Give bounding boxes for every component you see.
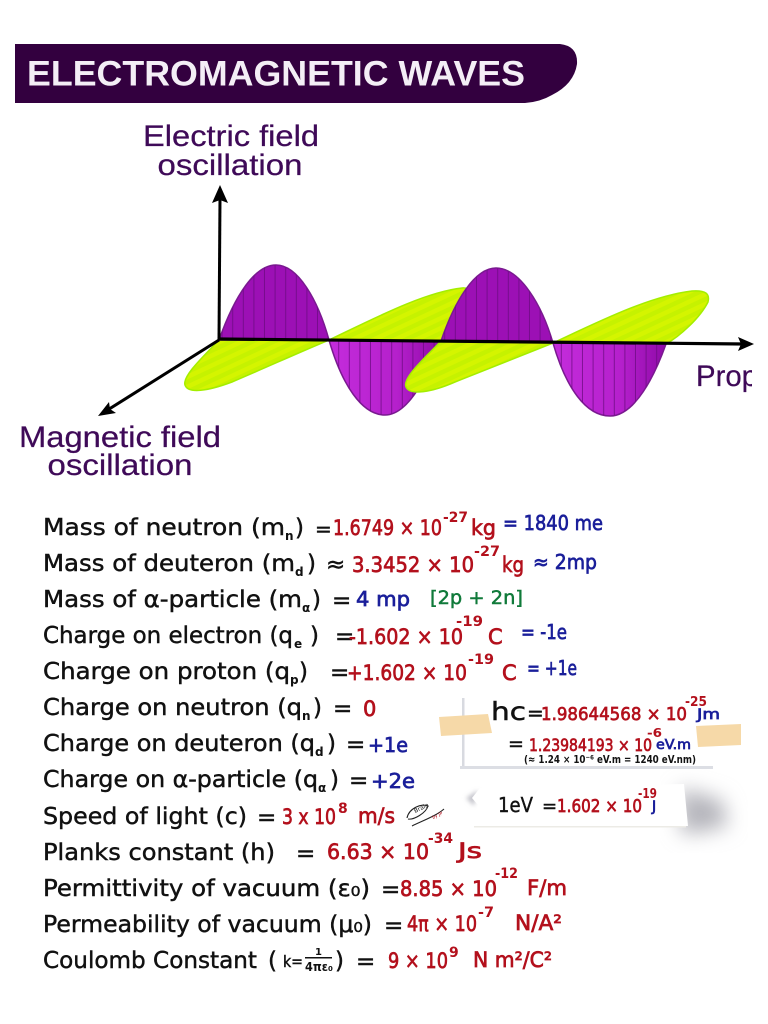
- row: mass of deuteron: d: [295, 565, 304, 579]
- signature scribble: [407, 802, 444, 826]
- row: permeability of vacuum: Permeability of vacuum (μ₀): [43, 912, 372, 938]
- row: charge on electron: -1.602 × 10: [349, 625, 463, 649]
- row: coulomb constant: =: [356, 949, 375, 975]
- row: mass of alpha particle: [43, 587, 523, 615]
- row: plancks constant: 6.63 × 10: [327, 840, 429, 864]
- row: coulomb constant: 1: [315, 947, 322, 958]
- row: permittivity of vacuum: F/m: [527, 876, 567, 900]
- row: charge on proton: C: [502, 661, 517, 685]
- note: hc value: eV.m: [656, 738, 691, 753]
- row: mass of alpha particle: α: [302, 601, 310, 615]
- row: plancks constant: [43, 831, 482, 867]
- row: permittivity of vacuum: Permittivity of vacuum (ε₀): [43, 876, 370, 902]
- row: permeability of vacuum: 4π × 10: [407, 912, 477, 936]
- row: mass of alpha particle: =: [332, 588, 351, 614]
- note: hc value: -6: [647, 726, 662, 740]
- row: charge on electron: =: [335, 624, 354, 650]
- electric field label: [143, 120, 319, 182]
- row: charge on proton: Charge on proton (q: [43, 659, 290, 685]
- row: speed of light: 3 x 10: [282, 805, 336, 829]
- row: charge on proton: =: [330, 660, 349, 686]
- note: hc value: (≈ 1.24 × 10⁻⁶ eV.m = 1240 eV.nm): [524, 753, 696, 766]
- row: charge on proton: [43, 652, 577, 687]
- row: permeability of vacuum: [43, 905, 562, 939]
- row: charge on deuteron: d: [315, 745, 324, 759]
- note: electron volt: 1.602 × 10: [557, 796, 642, 817]
- row: plancks constant: -34: [428, 831, 453, 847]
- row: charge on alpha particle: =: [349, 768, 368, 794]
- row: mass of deuteron: Mass of deuteron (m: [43, 551, 295, 577]
- row: coulomb constant: 4πε₀: [305, 960, 333, 974]
- row: charge on electron: = -1e: [521, 620, 567, 644]
- note: hc value: hc: [491, 697, 526, 726]
- row: charge on proton: p: [290, 673, 299, 687]
- row: mass of neutron: [43, 510, 603, 543]
- tape right: [696, 724, 741, 747]
- row: coulomb constant: Coulomb Constant: [43, 948, 257, 974]
- row: mass of deuteron: [43, 544, 597, 579]
- row: mass of neutron: kg: [471, 516, 496, 540]
- row: charge on deuteron: =: [346, 732, 365, 758]
- row: charge on proton: +1.602 × 10: [347, 661, 467, 685]
- note: hc value: =: [527, 701, 544, 725]
- row: charge on electron: Charge on electron (q: [43, 623, 293, 649]
- row: charge on electron: C: [488, 625, 503, 649]
- row: coulomb constant: N m²/C²: [473, 948, 552, 972]
- signature scribble: Brain: [413, 802, 430, 815]
- note: hc value: -25: [685, 695, 707, 710]
- magnetic field label: [19, 421, 221, 482]
- row: permittivity of vacuum: [43, 866, 567, 903]
- row: charge on electron: ): [310, 623, 319, 649]
- row: speed of light: [43, 801, 395, 831]
- row: mass of deuteron: ≈ 2mp: [533, 550, 597, 574]
- row: charge on neutron: =: [333, 696, 352, 722]
- row: mass of neutron: -27: [443, 510, 468, 526]
- row: charge on neutron: Charge on neutron (q: [43, 695, 302, 721]
- row: charge on neutron: ): [313, 695, 322, 721]
- title banner: [15, 44, 577, 103]
- signature scribble: by JP: [431, 811, 444, 821]
- magnetic field lobes, back: [329, 288, 469, 341]
- row: permittivity of vacuum: -12: [495, 866, 518, 882]
- row: charge on deuteron: [43, 731, 408, 759]
- row: charge on proton: -19: [468, 652, 494, 668]
- row: speed of light: =: [257, 805, 276, 831]
- tape left: [439, 714, 492, 736]
- note: hc value: 1.98644568 × 10: [541, 704, 687, 725]
- row: charge on electron: e: [294, 637, 302, 651]
- electric field label: Electric field: [143, 120, 319, 153]
- electromagnetic wave diagram: [98, 185, 754, 416]
- row: mass of neutron: Mass of neutron (m: [43, 515, 285, 541]
- row: mass of deuteron: 3.3452 × 10: [352, 553, 474, 577]
- title banner: ELECTROMAGNETIC WAVES: [27, 54, 525, 94]
- row: charge on deuteron: ): [327, 731, 336, 757]
- row: coulomb constant: (: [268, 948, 277, 974]
- row: charge on neutron: [43, 695, 376, 723]
- electric field label: oscillation: [158, 149, 302, 182]
- row: coulomb constant: 9 × 10: [388, 949, 448, 973]
- axes: [98, 185, 754, 416]
- row: charge on alpha particle: +2e: [371, 769, 415, 793]
- note: hc value: [439, 695, 741, 769]
- row: mass of neutron: n: [285, 529, 294, 543]
- note: electron volt: J: [651, 799, 656, 815]
- row: mass of neutron: 1.6749 × 10: [333, 516, 442, 540]
- note: hc value: =: [508, 733, 524, 755]
- row: plancks constant: Planks constant (h): [43, 840, 275, 866]
- magnetic field label: Magnetic field: [19, 421, 221, 454]
- row: mass of deuteron: kg: [502, 553, 524, 577]
- note: electron volt: -19: [638, 787, 657, 802]
- row: mass of neutron: = 1840 me: [503, 511, 603, 535]
- row: speed of light: m/s: [358, 804, 395, 828]
- row: mass of deuteron: ≈: [326, 552, 345, 578]
- note: hc value: Jm: [696, 707, 720, 723]
- row: mass of alpha particle: Mass of α-particle (m: [43, 587, 302, 613]
- row: mass of alpha particle: [2p + 2n]: [430, 587, 523, 609]
- row: charge on neutron: 0: [363, 697, 376, 721]
- note: electron volt: =: [542, 796, 557, 817]
- note: hc value: 1.23984193 × 10: [529, 736, 652, 756]
- row: charge on alpha particle: ): [330, 767, 339, 793]
- magnetic field lobe, front: [406, 341, 553, 392]
- row: permeability of vacuum: N/A²: [515, 911, 562, 935]
- row: charge on deuteron: +1e: [368, 733, 408, 757]
- row: charge on alpha particle: [43, 767, 415, 795]
- row: charge on electron: -19: [456, 614, 483, 630]
- row: mass of deuteron: -27: [474, 544, 500, 560]
- electric field lobes: [219, 265, 666, 416]
- row: mass of alpha particle: ): [312, 587, 321, 613]
- row: charge on deuteron: Charge on deuteron (q: [43, 731, 315, 757]
- row: charge on proton: = +1e: [527, 656, 577, 680]
- row: coulomb constant: ): [335, 948, 344, 974]
- row: charge on alpha particle: α: [318, 781, 326, 795]
- row: charge on proton: ): [299, 659, 308, 685]
- row: charge on alpha particle: Charge on α-particle (q: [43, 767, 318, 793]
- note: electron volt: 1eV: [498, 793, 533, 817]
- magnetic field label: oscillation: [48, 449, 192, 482]
- row: speed of light: Speed of light (c): [43, 804, 247, 830]
- row: charge on neutron: n: [302, 709, 311, 723]
- row: coulomb constant: [43, 945, 552, 975]
- row: mass of deuteron: ): [307, 551, 316, 577]
- row: permeability of vacuum: -7: [478, 905, 494, 921]
- paper shadow: [680, 788, 728, 834]
- row: coulomb constant: k=: [283, 952, 303, 971]
- propagation label: Prop: [696, 360, 758, 393]
- row: speed of light: 8: [338, 801, 348, 817]
- row: mass of alpha particle: 4 mp: [356, 587, 410, 611]
- note: electron volt: [466, 784, 728, 834]
- row: permittivity of vacuum: 8.85 × 10: [400, 877, 497, 901]
- constants table: [43, 510, 603, 975]
- row: charge on electron: [43, 614, 567, 651]
- row: mass of neutron: ): [295, 515, 304, 541]
- row: permeability of vacuum: =: [384, 913, 403, 939]
- row: plancks constant: =: [296, 841, 315, 867]
- row: mass of neutron: =: [315, 517, 332, 541]
- row: coulomb constant: 9: [449, 945, 459, 961]
- row: plancks constant: Js: [455, 839, 482, 863]
- row: permittivity of vacuum: =: [381, 877, 400, 903]
